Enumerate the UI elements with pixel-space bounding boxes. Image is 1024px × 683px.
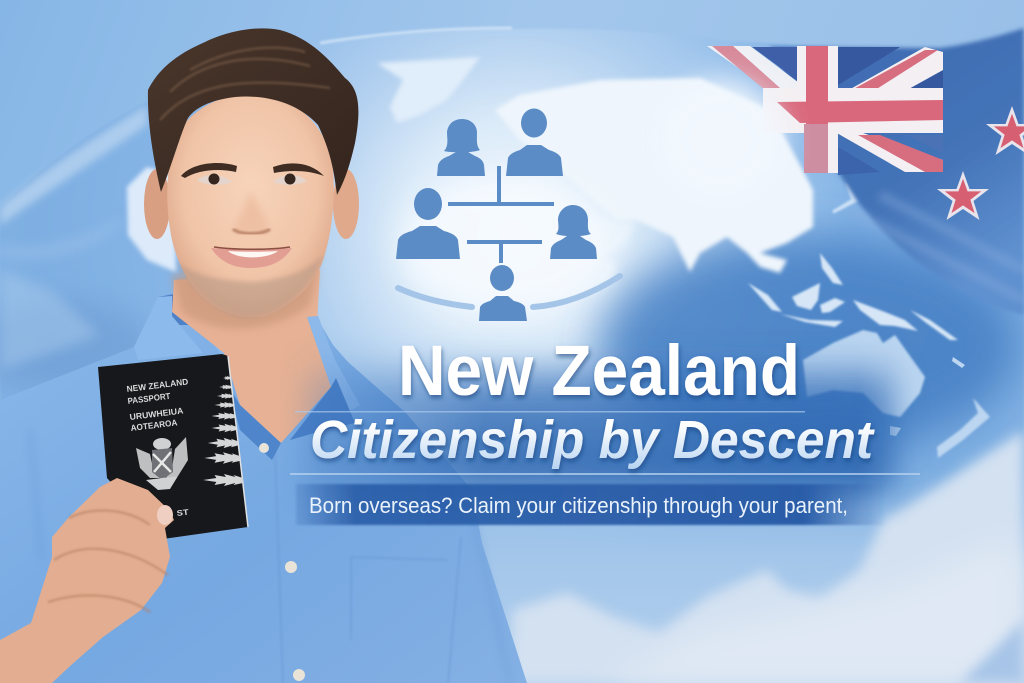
white streak clouds: [0, 105, 147, 225]
union jack canton: [707, 46, 943, 175]
stubble: [177, 255, 324, 318]
shirt details: [275, 450, 461, 683]
continent: Australia: [803, 330, 925, 417]
ears: [144, 169, 170, 239]
nose: [233, 229, 270, 234]
man left: [396, 188, 460, 259]
neck: [172, 270, 331, 443]
family tree icon: [396, 108, 597, 321]
continent: New Zealand: [937, 398, 990, 458]
flag star: [937, 171, 989, 220]
continent: North America: [127, 167, 176, 272]
passport fern: [203, 376, 243, 486]
continent: Africa: [520, 215, 635, 300]
child: [479, 265, 527, 321]
hand holding passport: [0, 478, 174, 683]
hair: [148, 28, 358, 195]
passport: [98, 354, 248, 539]
eyebrows: [181, 163, 324, 178]
title line two: Citizenship by Descent: [310, 410, 875, 470]
lower sky: [0, 470, 1024, 683]
subtitle band: [296, 484, 886, 525]
flag folds: [850, 195, 1024, 300]
passport text: [126, 377, 189, 518]
collar shadow left: [158, 293, 190, 325]
passport text: AOTEAROA: [130, 417, 178, 433]
title band: [300, 352, 900, 492]
shirt buttons: [259, 443, 305, 681]
passport cover: [98, 354, 248, 539]
thumb nail: [157, 505, 173, 525]
tree connector lower: [467, 240, 542, 263]
man portrait: [0, 28, 527, 683]
flag field: [770, 28, 1024, 315]
central glow: [400, 175, 610, 315]
man top: [506, 108, 563, 176]
face: [167, 94, 334, 317]
collar left: [134, 296, 203, 360]
clouds: [510, 430, 1024, 683]
finger creases: [48, 511, 168, 612]
ocean shading: [600, 235, 1020, 455]
smile: [211, 248, 292, 268]
passport text: ST: [176, 508, 189, 518]
globe arcs: [398, 276, 620, 307]
woman top: [437, 119, 485, 176]
lower left mottled clouds: [0, 217, 123, 370]
flag star: [986, 106, 1024, 155]
eyes: [197, 175, 232, 185]
passport text: NEW ZEALAND: [126, 377, 189, 394]
woman right: [550, 205, 597, 259]
flag fade glow: [658, 80, 782, 200]
title backdrop: [290, 352, 920, 525]
lower left shading: [0, 300, 150, 390]
passport text: URUWHEIUA: [129, 405, 184, 422]
continent: Japan: [833, 183, 857, 212]
New Zealand flag: [658, 28, 1024, 315]
title line one: New Zealand: [398, 332, 800, 411]
continent: south east Asia islands: [748, 253, 958, 340]
collar right: [307, 316, 360, 425]
passport text: PASSPORT: [127, 391, 172, 406]
tree connector upper: [448, 166, 554, 206]
nose shade: [234, 190, 268, 232]
subtitle: Born overseas? Claim your citizenship through your parent,: [309, 493, 848, 518]
continent: Greenland: [377, 57, 480, 123]
passport emblem: [136, 437, 188, 490]
hair highlights: [160, 48, 330, 120]
shirt: [0, 293, 527, 683]
continent: Eurasia: [495, 78, 813, 273]
